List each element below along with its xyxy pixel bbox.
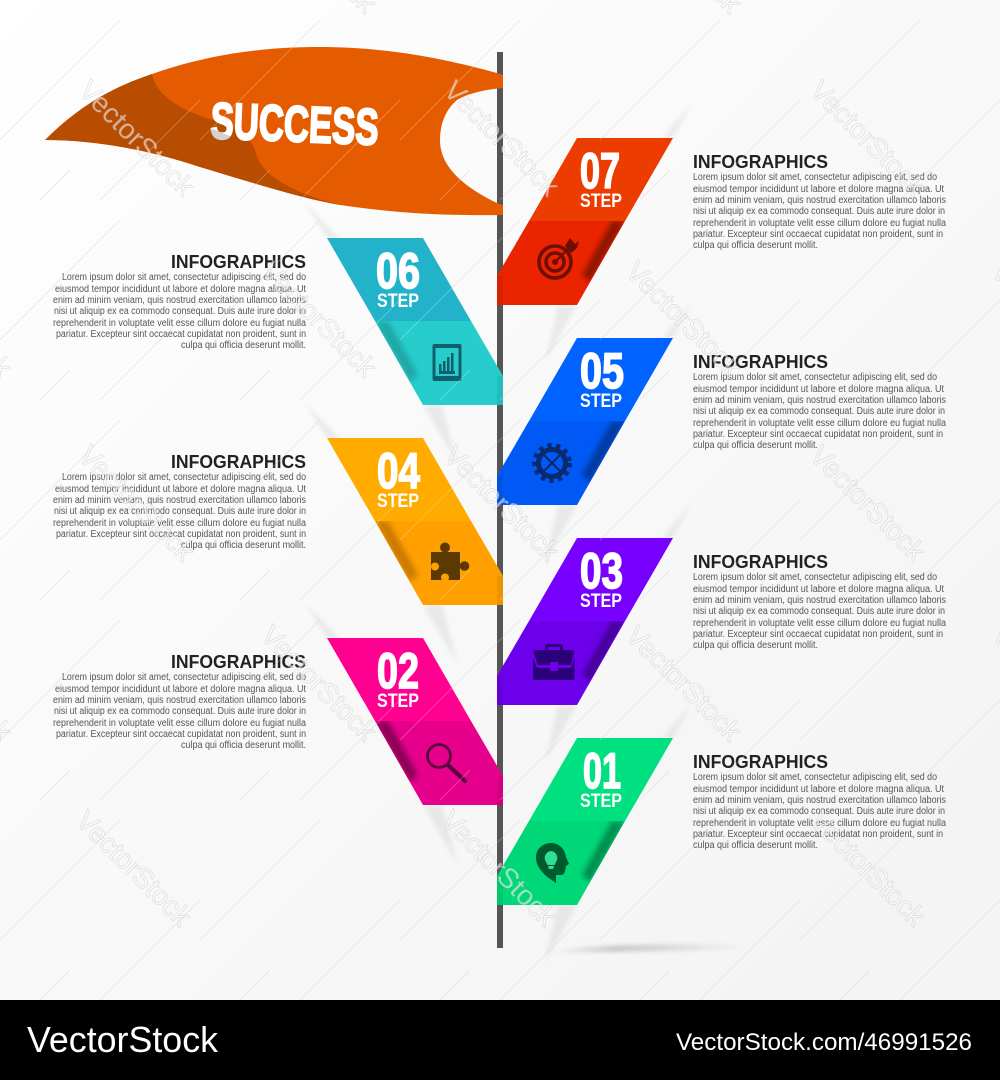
text block: step 06: culpa qui officia deserunt mollit. [181,340,306,351]
text block: step 05: culpa qui officia deserunt mollit. [693,440,818,451]
ribbon shadow [375,321,418,382]
text block: step 02: Lorem ipsum dolor sit amet, consectetur adipiscing elit, sed do [62,672,306,683]
watermarks: VectorStock [804,439,932,568]
fold shadows [545,703,692,962]
flag body [45,47,503,215]
watermarks: VectorStock [438,74,566,203]
ribbon upper [327,438,471,521]
ribbon lower [497,221,625,305]
number: 04 [377,443,420,499]
text block: step 04 [53,452,306,551]
text block: step 04: INFOGRAPHICS [171,452,306,472]
pole [497,52,503,948]
text block: step 01: pariatur. Excepteur sint occaecat cupidatat non proident, sunt in [693,829,943,840]
text block: step 02: reprehenderit in voluptate velit esse cillum dolore eu fugiat nulla [53,718,306,729]
ribbon shadow [582,221,625,282]
ribbon shadow [375,521,418,582]
step label: STEP [377,291,419,312]
ribbon shadow [582,821,625,882]
text block: step 01: culpa qui officia deserunt mollit. [693,840,818,851]
text block: step 07: INFOGRAPHICS [693,152,828,172]
flag [45,47,503,215]
step label: STEP [580,791,622,812]
text block: step 03: reprehenderit in voluptate velit esse cillum dolore eu fugiat nulla [693,618,946,629]
pole tint over ribbons [497,276,503,905]
ribbon upper [529,338,673,421]
watermarks: VectorStock [73,74,201,203]
panel: step 02 [314,614,503,854]
watermarks: VectorStock [255,255,383,384]
panel: step 05 [497,315,683,550]
text block: step 01: eiusmod tempor incididunt ut labore et dolore magna aliqua. Ut [693,784,944,795]
text block: step 02: nisi ut aliquip ex ea commodo consequat. Duis aute irure dolor in [54,706,306,717]
text block: step 02: INFOGRAPHICS [171,652,306,672]
ribbon upper [529,138,673,221]
fold shadows [545,103,692,362]
watermarks: VectorStock [255,619,383,748]
ribbon upper [529,738,673,821]
number: 05 [580,343,624,399]
watermarks: VectorStock [70,804,198,933]
text block: step 04: enim ad minim veniam, quis nostrud exercitation ullamco laboris [53,495,306,506]
ribbon lower [375,321,503,405]
panel: step 04 [314,414,503,654]
panel: step 07 [497,115,684,352]
text block: step 07 [693,152,946,251]
text block: step 05: Lorem ipsum dolor sit amet, consectetur adipiscing elit, sed do [693,372,937,383]
text block: step 02 [53,652,306,751]
text block: step 04: pariatur. Excepteur sint occaecat cupidatat non proident, sunt in [56,529,306,540]
text block: step 04: Lorem ipsum dolor sit amet, consectetur adipiscing elit, sed do [62,472,306,483]
fold shadows [545,503,692,762]
text block: step 07: enim ad minim veniam, quis nostrud exercitation ullamco laboris [693,195,946,206]
icon: magnifier [428,744,465,781]
text block: step 05: nisi ut aliquip ex ea commodo consequat. Duis aute irure dolor in [693,406,945,417]
text block: step 02: culpa qui officia deserunt mollit. [181,740,306,751]
fold shadows [545,303,692,562]
ribbon upper [327,638,471,721]
ribbon shadow [582,421,625,482]
icon: tablet chart [432,344,462,381]
watermarks: VectorStock [804,804,932,933]
icon: head with bulb [536,843,569,883]
text block: step 04: reprehenderit in voluptate velit esse cillum dolore eu fugiat nulla [53,518,306,529]
text block: step 07: eiusmod tempor incididunt ut labore et dolore magna aliqua. Ut [693,184,944,195]
text block: step 07: reprehenderit in voluptate velit esse cillum dolore eu fugiat nulla [693,218,946,229]
watermarks: VectorStock [438,439,566,568]
number: 01 [583,743,621,799]
ribbon lower [375,721,503,805]
text block: step 05: enim ad minim veniam, quis nostrud exercitation ullamco laboris [693,395,946,406]
text block: step 03: enim ad minim veniam, quis nostrud exercitation ullamco laboris [693,595,946,606]
watermarks: VectorStock [620,619,748,748]
step label: STEP [377,691,419,712]
ribbon lower [497,821,625,905]
step label: STEP [377,491,419,512]
icon: briefcase [533,644,574,680]
text block: step 07: nisi ut aliquip ex ea commodo consequat. Duis aute irure dolor in [693,206,945,217]
text block: step 01: INFOGRAPHICS [693,752,828,772]
ribbon lower [497,621,625,705]
step label: STEP [580,391,622,412]
flag fold [45,74,340,205]
text block: step 03: eiusmod tempor incididunt ut labore et dolore magna aliqua. Ut [693,584,944,595]
text block: step 02: enim ad minim veniam, quis nostrud exercitation ullamco laboris [53,695,306,706]
step label: STEP [580,191,622,212]
text block: step 06: nisi ut aliquip ex ea commodo consequat. Duis aute irure dolor in [54,306,306,317]
footer image id: VectorStock.com/46991526 [676,1029,972,1056]
text block: step 06: eiusmod tempor incididunt ut labore et dolore magna aliqua. Ut [55,284,306,295]
footer bar [0,1000,1000,1080]
text block: step 03: nisi ut aliquip ex ea commodo consequat. Duis aute irure dolor in [693,606,945,617]
text block: step 07: Lorem ipsum dolor sit amet, consectetur adipiscing elit, sed do [693,172,937,183]
text block: step 06: INFOGRAPHICS [171,252,306,272]
number: 02 [377,643,419,699]
text block: step 03: INFOGRAPHICS [693,552,828,572]
panel: step 03 [497,515,684,752]
text block: step 03: pariatur. Excepteur sint occaecat cupidatat non proident, sunt in [693,629,943,640]
footer brand: VectorStock [27,1019,219,1060]
fold shadows [305,603,458,865]
step label: STEP [580,591,622,612]
base shadow [552,944,760,952]
number: 07 [580,143,620,199]
ribbon lower [497,421,625,505]
panel: step 01 [497,716,684,952]
text block: step 06: Lorem ipsum dolor sit amet, consectetur adipiscing elit, sed do [62,272,306,283]
ribbon lower [375,521,503,605]
text block: step 03: Lorem ipsum dolor sit amet, consectetur adipiscing elit, sed do [693,572,937,583]
text block: step 05 [693,352,946,451]
text block: step 06: reprehenderit in voluptate velit esse cillum dolore eu fugiat nulla [53,318,306,329]
text block: step 02: pariatur. Excepteur sint occaecat cupidatat non proident, sunt in [56,729,306,740]
ribbon shadow [582,621,625,682]
watermarks: VectorStock [73,439,201,568]
text block: step 07: pariatur. Excepteur sint occaecat cupidatat non proident, sunt in [693,229,943,240]
fold shadows [305,203,458,465]
text block: step 04: eiusmod tempor incididunt ut labore et dolore magna aliqua. Ut [55,484,306,495]
panel: step 06 [314,214,503,452]
text block: step 02: eiusmod tempor incididunt ut labore et dolore magna aliqua. Ut [55,684,306,695]
ribbon shadow [375,721,418,782]
flag title: SUCCESS [210,92,380,156]
fold shadows [305,403,458,665]
text block: step 06: enim ad minim veniam, quis nostrud exercitation ullamco laboris [53,295,306,306]
text block: step 03: culpa qui officia deserunt mollit. [693,640,818,651]
watermarks: VectorStock [804,74,932,203]
text block: step 04: nisi ut aliquip ex ea commodo consequat. Duis aute irure dolor in [54,506,306,517]
watermarks: VectorStock [620,255,748,384]
text block: step 03 [693,552,946,651]
text block: step 06 [53,252,306,351]
text block: step 05: INFOGRAPHICS [693,352,828,372]
text block: step 01 [693,752,946,851]
text block: step 05: eiusmod tempor incididunt ut labore et dolore magna aliqua. Ut [693,384,944,395]
watermarks: VectorStock [435,804,563,933]
text block: step 06: pariatur. Excepteur sint occaecat cupidatat non proident, sunt in [56,329,306,340]
number: 03 [580,543,623,599]
icon: target [539,238,579,278]
text block: step 05: reprehenderit in voluptate velit esse cillum dolore eu fugiat nulla [693,418,946,429]
icon: puzzle piece [431,542,469,582]
text block: step 05: pariatur. Excepteur sint occaecat cupidatat non proident, sunt in [693,429,943,440]
ribbon upper [529,538,673,621]
text block: step 01: enim ad minim veniam, quis nostrud exercitation ullamco laboris [693,795,946,806]
text block: step 01: nisi ut aliquip ex ea commodo consequat. Duis aute irure dolor in [693,806,945,817]
text block: step 01: Lorem ipsum dolor sit amet, consectetur adipiscing elit, sed do [693,772,937,783]
number: 06 [376,243,420,299]
icon: gear [534,446,570,480]
ribbon upper [327,238,471,321]
text block: step 04: culpa qui officia deserunt mollit. [181,540,306,551]
text block: step 07: culpa qui officia deserunt mollit. [693,240,818,251]
text block: step 01: reprehenderit in voluptate velit esse cillum dolore eu fugiat nulla [693,818,946,829]
